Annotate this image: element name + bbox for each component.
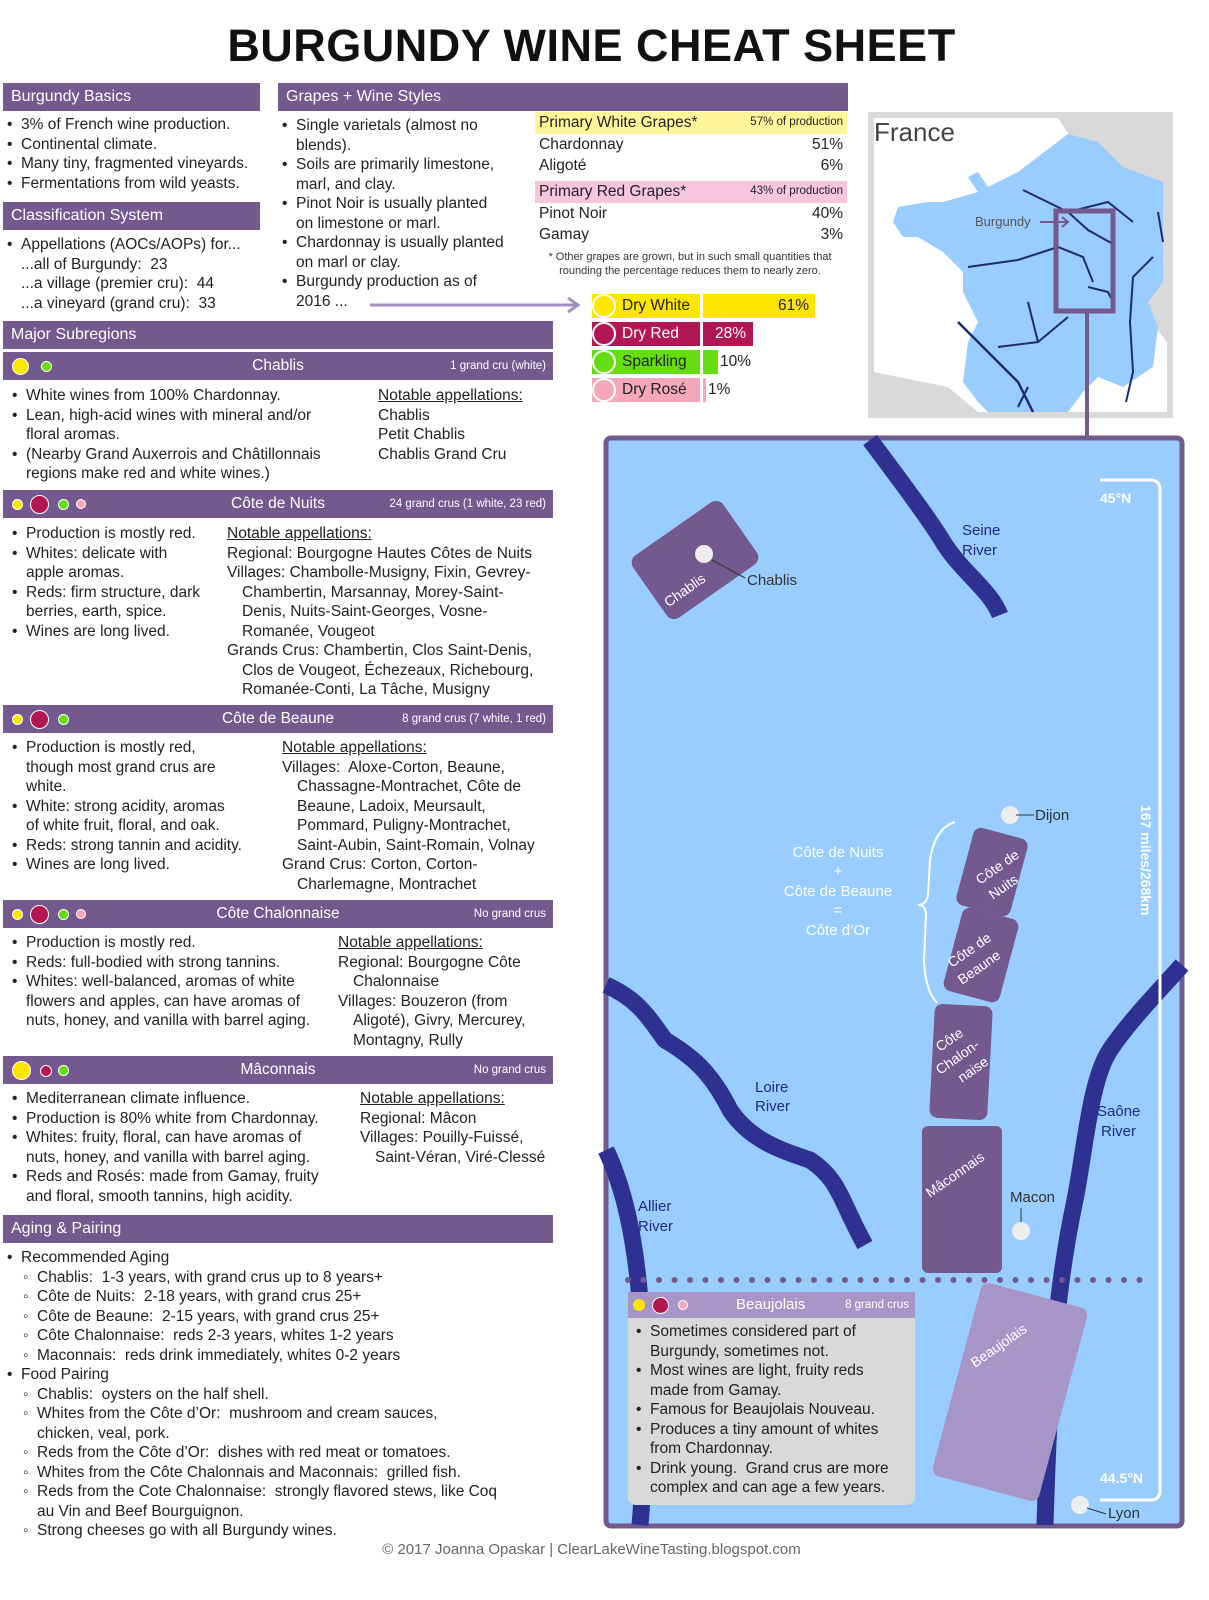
grapes list: Soils are primarily limestone, <box>296 156 494 173</box>
Cote Chalonnaise text: Whites: well-balanced, aromas of white <box>26 973 295 990</box>
Beaujolais header: 8 grand crus <box>845 1299 909 1311</box>
Cote de Beaune appellations: Villages: Aloxe-Corton, Beaune, <box>282 758 505 776</box>
grapes list: Burgundy production as of <box>296 273 477 290</box>
classification list <box>8 236 241 312</box>
bar: dry white: Dry White <box>622 297 690 314</box>
header: Major Subregions <box>3 321 553 349</box>
header: Grapes + Wine Styles <box>278 83 848 111</box>
river labels: River <box>962 542 997 559</box>
region: Maconnais <box>922 1126 1002 1273</box>
Maconnais text: nuts, honey, and vanilla with barrel aging. <box>26 1148 310 1166</box>
header: Grapes + Wine Styles: Grapes + Wine Styles <box>286 88 441 105</box>
white grapes table: 6% <box>821 157 843 174</box>
white grapes table: Chardonnay <box>539 136 623 153</box>
wine style bars <box>592 294 815 402</box>
grapes list: Single varietals (almost no <box>296 117 478 134</box>
bar: Chablis <box>3 352 553 380</box>
footnote: * Other grapes are grown, but in such small quantities that rounding the percentage reduces them to nearly zero. <box>548 251 832 277</box>
Chablis text: regions make red and white wines.) <box>26 465 270 482</box>
Cote de Nuits appellations: Notable appellations: <box>227 525 372 542</box>
Cote Chalonnaise text: flowers and apples, can have aromas of <box>26 992 300 1010</box>
Beaujolais header <box>628 1292 915 1318</box>
Cote Chalonnaise text: Production is mostly red. <box>26 934 196 951</box>
region: Chablis: Chablis <box>747 572 797 589</box>
bar: Cote de Beaune: Côte de Beaune <box>222 710 334 727</box>
bar: sparkling <box>592 350 700 374</box>
aging and pairing list: Strong cheeses go with all Burgundy wines. <box>37 1522 337 1539</box>
Cote de Nuits text: Production is mostly red. <box>26 525 196 542</box>
red grapes table: 43% of production <box>750 185 843 197</box>
Beaujolais list: from Chardonnay. <box>650 1440 773 1457</box>
bar: Maconnais: Mâconnais <box>241 1061 315 1078</box>
Cote Chalonnaise appellations: Aligoté), Givry, Mercurey, <box>353 1012 526 1029</box>
region: Cote de Beaune <box>942 906 1020 1004</box>
river labels: River <box>755 1098 790 1115</box>
map frame <box>606 438 1182 1526</box>
Chablis appellations: Petit Chablis <box>378 426 465 443</box>
Cote de Beaune appellations: Charlemagne, Montrachet <box>297 876 476 892</box>
aging and pairing list: chicken, veal, pork. <box>37 1424 170 1442</box>
aging and pairing list: Whites from the Côte Chalonnais and Maconnais: grilled fish. <box>37 1464 461 1480</box>
Chablis text <box>12 387 321 482</box>
Maconnais text: and floral, smooth tannins, high acidity. <box>26 1188 293 1204</box>
label: Cote d'Or equation: = <box>834 902 843 919</box>
Cote Chalonnaise appellations: Regional: Bourgogne Côte <box>338 954 521 970</box>
Maconnais appellations <box>360 1090 545 1166</box>
Chablis appellations: Notable appellations: <box>378 387 523 404</box>
bar: Cote de Beaune <box>3 705 553 733</box>
Cote de Nuits text <box>12 525 200 640</box>
wine style bars: 61% <box>778 297 809 314</box>
Beaujolais header: Beaujolais <box>736 1296 805 1313</box>
river labels: Allier <box>638 1198 671 1215</box>
aging and pairing list: Reds from the Côte d’Or: dishes with red meat or tomatoes. <box>37 1444 451 1461</box>
Maconnais appellations: Saint-Véran, Viré-Clessé <box>375 1148 545 1166</box>
label: Cote d'Or equation <box>784 822 955 1003</box>
Cote de Nuits appellations: Denis, Nuits-Saint-Georges, Vosne- <box>242 603 488 620</box>
classification list: ...a vineyard (grand cru): 33 <box>21 294 216 312</box>
Cote de Nuits text: apple aromas. <box>26 564 124 581</box>
France map: Burgundy <box>975 214 1031 229</box>
grapes list: on limestone or marl. <box>296 214 441 232</box>
bar: Maconnais <box>3 1056 553 1084</box>
classification list: Appellations (AOCs/AOPs) for... <box>21 236 241 253</box>
red grapes table: Primary Red Grapes* <box>539 183 686 200</box>
Chablis text: White wines from 100% Chardonnay. <box>26 387 281 404</box>
bar: dry red <box>592 322 700 346</box>
Beaujolais list: made from Gamay. <box>650 1382 782 1398</box>
header: Classification System: Classification System <box>11 207 163 224</box>
header: Burgundy Basics <box>3 83 260 111</box>
label: Cote d'Or equation: + <box>834 863 843 880</box>
Dijon: Dijon <box>1035 807 1069 824</box>
aging and pairing list: Côte de Beaune: 2-15 years, with grand crus 25+ <box>37 1308 380 1324</box>
Cote de Beaune appellations: Pommard, Puligny-Montrachet, <box>297 817 511 834</box>
white grapes table <box>535 112 847 174</box>
Cote Chalonnaise appellations: Montagny, Rully <box>353 1032 463 1048</box>
Maconnais text: Production is 80% white from Chardonnay. <box>26 1110 319 1126</box>
bar: sparkling: Sparkling <box>622 353 687 370</box>
Cote de Nuits appellations: Grands Crus: Chambertin, Clos Saint-Denis, <box>227 642 532 659</box>
header: Aging & Pairing <box>3 1215 553 1243</box>
wine style bars: 1% <box>708 381 730 398</box>
Chablis appellations <box>378 387 523 462</box>
region: Cote de Beaune: Beaune <box>955 947 1003 987</box>
header: Aging & Pairing: Aging & Pairing <box>11 1220 121 1237</box>
aging and pairing list: Chablis: oysters on the half shell. <box>37 1386 269 1402</box>
Cote Chalonnaise text: Reds: full-bodied with strong tannins. <box>26 954 280 970</box>
scale bar <box>1100 480 1160 1500</box>
header: Classification System <box>3 202 260 230</box>
basics list <box>8 116 248 192</box>
Chablis text: Lean, high-acid wines with mineral and/or <box>26 406 311 424</box>
red grapes table <box>535 181 847 243</box>
Chablis appellations: Chablis Grand Cru <box>378 446 506 462</box>
Cote de Nuits appellations: Romanée-Conti, La Tâche, Musigny <box>242 681 490 698</box>
bar: Maconnais: No grand crus <box>474 1064 546 1076</box>
Cote de Beaune text: Reds: strong tannin and acidity. <box>26 836 242 854</box>
connector: burgundy box to map <box>1056 211 1113 470</box>
white grapes table: 57% of production <box>750 116 843 128</box>
Maconnais appellations: Notable appellations: <box>360 1090 505 1107</box>
Maconnais appellations: Regional: Mâcon <box>360 1110 476 1126</box>
Cote de Nuits appellations: Villages: Chambolle-Musigny, Fixin, Gevrey- <box>227 564 531 581</box>
region: Maconnais: Mâconnais <box>923 1149 987 1200</box>
Cote Chalonnaise appellations: Notable appellations: <box>338 934 483 951</box>
aging and pairing list <box>8 1249 497 1539</box>
Cote de Nuits appellations: Clos de Vougeot, Échezeaux, Richebourg, <box>242 662 533 678</box>
Cote de Beaune text: of white fruit, floral, and oak. <box>26 817 220 834</box>
header: Burgundy Basics: Burgundy Basics <box>11 88 131 105</box>
white grapes table: Aligoté <box>539 157 586 174</box>
label: Cote d'Or equation: Côte de Beaune <box>784 883 892 900</box>
bar: dry white <box>592 294 700 318</box>
grapes list: blends). <box>296 136 351 154</box>
Cote de Nuits appellations <box>227 525 533 698</box>
Cote de Nuits text: Reds: firm structure, dark <box>26 584 200 600</box>
grapes list: marl, and clay. <box>296 176 396 192</box>
river labels: Loire <box>755 1079 788 1096</box>
dotted boundary <box>628 1277 1150 1283</box>
Cote de Beaune appellations: Chassagne-Montrachet, Côte de <box>297 778 521 795</box>
rivers <box>606 440 1182 1525</box>
Cote Chalonnaise appellations <box>338 934 526 1048</box>
grapes list: 2016 ... <box>296 292 348 310</box>
wine style bars: 10% <box>720 353 751 370</box>
Cote de Beaune text: White: strong acidity, aromas <box>26 798 225 814</box>
France map: France <box>874 117 955 147</box>
Cote Chalonnaise text: nuts, honey, and vanilla with barrel aging. <box>26 1012 310 1029</box>
bar: Chablis: 1 grand cru (white) <box>450 360 546 372</box>
region: Cote de Nuits <box>955 826 1029 918</box>
aging and pairing list: Reds from the Cote Chalonnaise: strongly flavored stews, like Coq <box>37 1483 497 1500</box>
aging and pairing list: Recommended Aging <box>21 1249 169 1266</box>
Cote Chalonnaise appellations: Villages: Bouzeron (from <box>338 992 507 1010</box>
grapes list: Chardonnay is usually planted <box>296 234 504 251</box>
red grapes table: Pinot Noir <box>539 205 607 222</box>
bar: Cote Chalonnaise: No grand crus <box>474 908 546 920</box>
arrow to styles <box>370 296 580 314</box>
Macon: Macon <box>1010 1189 1055 1206</box>
basics list: 3% of French wine production. <box>21 116 230 133</box>
river labels: Saône <box>1097 1103 1140 1120</box>
Maconnais text: Whites: fruity, floral, can have aromas of <box>26 1129 301 1146</box>
label: Cote d'Or equation: Côte de Nuits <box>793 844 883 861</box>
Cote de Beaune text <box>12 739 242 873</box>
Lyon: Lyon <box>1108 1505 1140 1522</box>
bar: Cote de Nuits: Côte de Nuits <box>231 495 325 512</box>
bar: Cote de Nuits: 24 grand crus (1 white, 23 red) <box>389 498 546 510</box>
Chablis appellations: Chablis <box>378 406 430 424</box>
panel: Beaujolais <box>628 1292 915 1505</box>
region: Cote de Nuits: Nuits <box>986 871 1021 902</box>
region: Beaujolais <box>931 1281 1089 1503</box>
Cote de Beaune appellations <box>282 739 535 892</box>
header: Major Subregions: Major Subregions <box>11 326 136 343</box>
grapes list: Pinot Noir is usually planted <box>296 195 487 212</box>
bar: dry rose: Dry Rosé <box>622 381 687 398</box>
red grapes table: 40% <box>812 205 843 222</box>
aging and pairing list: Côte de Nuits: 2-18 years, with grand crus 25+ <box>37 1288 361 1305</box>
white grapes table: Primary White Grapes* <box>539 114 697 131</box>
grapes list <box>282 117 504 310</box>
Cote de Beaune appellations: Saint-Aubin, Saint-Romain, Volnay <box>297 836 535 854</box>
title: BURGUNDY WINE CHEAT SHEET <box>227 20 956 71</box>
river labels: River <box>1101 1123 1136 1140</box>
Beaujolais list <box>636 1323 889 1496</box>
Cote de Beaune text: Production is mostly red, <box>26 739 196 756</box>
aging and pairing list: Whites from the Côte d’Or: mushroom and cream sauces, <box>37 1405 438 1422</box>
Cote de Nuits text: berries, earth, spice. <box>26 603 166 620</box>
scale bar: 45°N <box>1100 490 1131 506</box>
Dijon <box>1001 806 1069 824</box>
white grapes table: 51% <box>812 136 843 153</box>
basics list: Many tiny, fragmented vineyards. <box>21 155 248 172</box>
aging and pairing list: Maconnais: reds drink immediately, whites 0-2 years <box>37 1346 400 1364</box>
wine style bars: 28% <box>715 325 746 342</box>
river labels: Seine <box>962 522 1000 539</box>
Beaujolais list: Most wines are light, fruity reds <box>650 1362 864 1379</box>
Cote de Nuits appellations: Chambertin, Marsannay, Morey-Saint- <box>242 584 504 600</box>
Cote de Beaune text: though most grand crus are <box>26 758 216 776</box>
bar: Cote Chalonnaise: Côte Chalonnaise <box>216 905 340 922</box>
region: Cote de Nuits: Côte de <box>973 846 1022 887</box>
aging and pairing list: au Vin and Beef Bourguignon. <box>37 1502 244 1520</box>
river labels: River <box>638 1218 673 1235</box>
Cote de Beaune text: Wines are long lived. <box>26 856 170 873</box>
Maconnais text: Mediterranean climate influence. <box>26 1090 250 1107</box>
aging and pairing list: Chablis: 1-3 years, with grand crus up to 8 years+ <box>37 1268 383 1286</box>
Cote Chalonnaise text <box>12 934 310 1029</box>
bar: dry red: Dry Red <box>622 325 679 342</box>
Cote Chalonnaise appellations: Chalonnaise <box>353 973 439 990</box>
bar: Cote de Nuits <box>3 490 553 518</box>
Maconnais appellations: Villages: Pouilly-Fuissé, <box>360 1129 523 1146</box>
Chablis text: (Nearby Grand Auxerrois and Châtillonnais <box>26 446 321 462</box>
Cote de Beaune text: white. <box>26 778 66 795</box>
Maconnais text: Reds and Rosés: made from Gamay, fruity <box>26 1168 319 1185</box>
label: Cote d'Or equation: Côte d’Or <box>806 922 870 939</box>
grapes list: on marl or clay. <box>296 254 401 270</box>
Beaujolais list: Sometimes considered part of <box>650 1323 856 1340</box>
Beaujolais list: Famous for Beaujolais Nouveau. <box>650 1401 875 1418</box>
Beaujolais list: Burgundy, sometimes not. <box>650 1342 829 1360</box>
scale bar: 167 miles/268km <box>1138 805 1154 916</box>
classification list: ...a village (premier cru): 44 <box>21 275 214 292</box>
Cote de Beaune appellations: Beaune, Ladoix, Meursault, <box>297 798 486 814</box>
region: Beaujolais: Beaujolais <box>968 1320 1030 1370</box>
Beaujolais list: complex and can age a few years. <box>650 1479 885 1496</box>
Cote de Nuits text: Wines are long lived. <box>26 622 170 640</box>
region: Cote Chalonnaise: Côte <box>933 1024 966 1054</box>
classification list: ...all of Burgundy: 23 <box>21 256 167 272</box>
basics list: Fermentations from wild yeasts. <box>21 174 240 192</box>
red grapes table: 3% <box>821 226 843 243</box>
footer credit: © 2017 Joanna Opaskar | ClearLakeWineTasting.blogspot.com <box>382 1541 801 1558</box>
region: Cote Chalonnaise <box>929 1004 993 1120</box>
region: Cote Chalonnaise: Chalon- <box>933 1036 982 1077</box>
Chablis text: floral aromas. <box>26 426 120 443</box>
Cote de Nuits appellations: Romanée, Vougeot <box>242 622 375 640</box>
Cote de Beaune appellations: Notable appellations: <box>282 739 427 756</box>
region: Chablis: Chablis <box>661 570 708 610</box>
France map <box>868 112 1173 418</box>
Beaujolais list: Drink young. Grand crus are more <box>650 1460 889 1476</box>
Macon <box>1010 1189 1055 1240</box>
bar: Chablis: Chablis <box>252 357 304 374</box>
aging and pairing list: Côte Chalonnaise: reds 2-3 years, whites 1-2 years <box>37 1327 394 1344</box>
Lyon <box>1071 1496 1140 1522</box>
Cote de Nuits appellations: Regional: Bourgogne Hautes Côtes de Nuits <box>227 544 532 562</box>
river labels <box>638 522 1140 1235</box>
bar: Cote de Beaune: 8 grand crus (7 white, 1 red) <box>402 713 546 725</box>
region: Cote de Beaune: Côte de <box>945 929 994 970</box>
region: Chablis <box>628 497 797 623</box>
Cote de Nuits text: Whites: delicate with <box>26 544 167 562</box>
bar: Cote Chalonnaise <box>3 900 553 928</box>
aging and pairing list: Food Pairing <box>21 1366 109 1383</box>
Cote de Beaune appellations: Grand Crus: Corton, Corton- <box>282 856 478 873</box>
scale bar: 44.5°N <box>1100 1470 1143 1486</box>
region: Cote Chalonnaise: naise <box>955 1053 991 1085</box>
Maconnais text <box>12 1090 319 1204</box>
bar: dry rose <box>592 378 700 402</box>
basics list: Continental climate. <box>21 136 157 152</box>
Beaujolais list: Produces a tiny amount of whites <box>650 1420 878 1438</box>
red grapes table: Gamay <box>539 226 589 243</box>
